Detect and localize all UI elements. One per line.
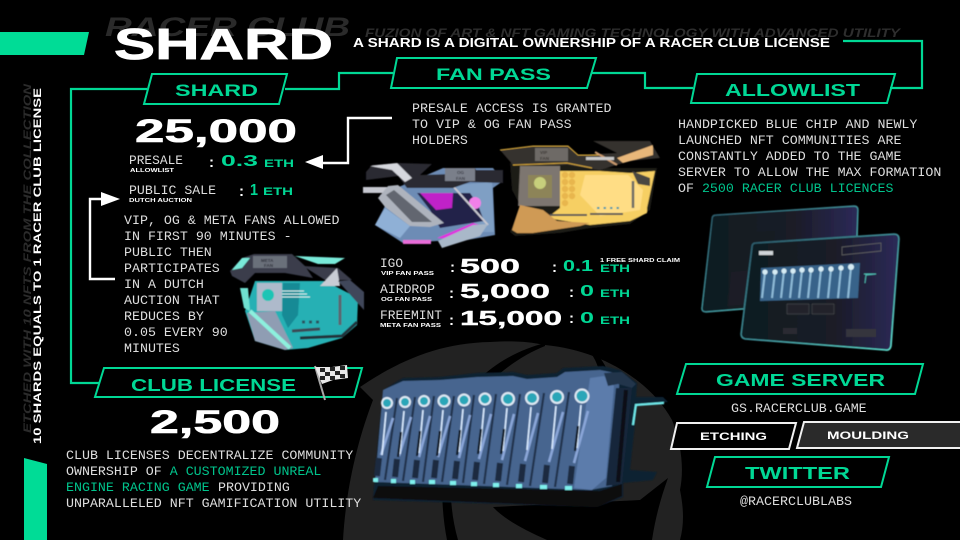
module cell grilles — [377, 458, 572, 484]
club license number: 2,500 — [150, 404, 280, 440]
twitter handle: @RACERCLUBLABS — [740, 494, 852, 509]
public sale price row: DUTCH AUCTION — [129, 198, 192, 204]
icon: vip fan pass shard — [500, 141, 660, 236]
module cell light strips — [381, 411, 588, 463]
module cell white stripes — [382, 405, 581, 455]
heading: game server: GAME SERVER — [716, 370, 885, 390]
igo row: IGO — [380, 256, 403, 271]
presale price row: 0.3 — [221, 153, 259, 170]
heading: fan pass — [391, 58, 596, 88]
heading: allowlist — [691, 74, 895, 103]
ghost tagline: FUZION OF ART & NFT GAMING TECHNOLOGY WITH ADVANCED UTILITY — [365, 26, 901, 40]
subtitle: A SHARD IS A DIGITAL OWNERSHIP OF A RACER CLUB LICENSE — [353, 36, 830, 50]
public sale price row: PUBLIC SALE — [129, 183, 216, 198]
public sale description: VIP, OG & META FANS ALLOWED — [124, 213, 339, 228]
allowlist description: CONSTANTLY ADDED TO THE GAME — [678, 149, 901, 164]
airdrop row: 5,000 — [460, 281, 550, 303]
igo row — [380, 256, 681, 278]
fan pass description: TO VIP & OG FAN PASS — [412, 117, 572, 132]
igo row: : — [450, 259, 455, 276]
freemint row: ETH — [600, 315, 630, 327]
module side bracket light — [633, 403, 664, 425]
club license description: PROVIDING — [218, 480, 290, 495]
icon: club license module — [373, 366, 668, 507]
freemint row: : — [449, 312, 454, 329]
presale price row — [129, 153, 294, 174]
background swirl logo — [343, 341, 683, 540]
igo row: : — [552, 259, 557, 276]
airdrop row: 0 — [580, 283, 594, 300]
public sale description: REDUCES BY — [124, 309, 204, 324]
public sale description: PARTICIPATES — [124, 261, 220, 276]
heading: shard — [144, 74, 287, 104]
bottom left green bar — [24, 458, 47, 540]
title: SHARD — [114, 20, 333, 69]
public sale description: AUCTION THAT — [124, 293, 220, 308]
icon: vip fan pass shard: VIP — [540, 150, 547, 155]
module cell dividers — [385, 392, 569, 487]
button: etching: ETCHING — [700, 431, 767, 443]
module lights — [382, 390, 588, 408]
icon: meta fan pass shard — [230, 254, 364, 350]
arrow: presale access to presale price — [305, 118, 392, 169]
club license description: OWNERSHIP OF A CUSTOMIZED UNREAL — [66, 464, 321, 479]
airdrop row: OG FAN PASS — [381, 297, 432, 303]
icon: og fan pass shard: FAN — [456, 176, 465, 181]
button: moulding: MOULDING — [827, 430, 909, 442]
game server url: GS.RACERCLUB.GAME — [731, 401, 867, 416]
freemint row: : — [569, 310, 574, 327]
airdrop row: : — [449, 285, 454, 302]
icon: vip fan pass shard: FAN — [540, 156, 549, 161]
heading: twitter — [707, 457, 889, 487]
freemint row: 15,000 — [460, 308, 562, 330]
freemint row: FREEMINT — [380, 308, 442, 323]
allowlist description: OF 2500 RACER CLUB LICENCES — [678, 181, 893, 196]
public sale price row: 1 — [250, 182, 258, 199]
module base lights — [373, 478, 572, 490]
airdrop row: AIRDROP — [380, 282, 435, 297]
icon: meta fan pass shard: FAN — [264, 263, 273, 268]
icon: meta fan pass shard: META — [261, 258, 274, 263]
heading: fan pass: FAN PASS — [436, 65, 551, 84]
igo row: 0.1 — [563, 258, 594, 275]
freemint row — [380, 308, 630, 330]
public sale price row — [129, 182, 293, 204]
club license description: CLUB LICENSES DECENTRALIZE COMMUNITY — [66, 448, 353, 463]
heading: game server — [677, 364, 923, 394]
icon: game server tablets — [702, 206, 899, 350]
top left green bar — [0, 32, 89, 55]
fan pass description: HOLDERS — [412, 133, 468, 148]
presale price row: ETH — [264, 158, 294, 170]
freemint row: 0 — [580, 310, 594, 327]
airdrop row — [380, 281, 630, 303]
allowlist description: LAUNCHED NFT COMMUNITIES ARE — [678, 133, 901, 148]
public sale description: MINUTES — [124, 341, 180, 356]
igo row: VIP FAN PASS — [381, 271, 434, 277]
public sale description: 0.05 EVERY 90 — [124, 325, 228, 340]
heading: shard: SHARD — [175, 81, 258, 100]
heading: twitter: TWITTER — [745, 463, 850, 483]
public sale price row: ETH — [263, 186, 293, 198]
club license description: ENGINE RACING GAME — [66, 480, 210, 495]
ghost vertical caption: ETCHED WITH 10 NFTS FROM THE COLLECTION — [22, 83, 34, 433]
igo row: 1 FREE SHARD CLAIM — [600, 258, 681, 264]
igo row: 500 — [460, 256, 520, 278]
module cell dark slots — [398, 426, 578, 457]
freemint row: META FAN PASS — [380, 323, 441, 329]
airdrop row: ETH — [600, 288, 630, 300]
public sale price row: : — [239, 183, 244, 200]
club license description: UNPARALLELED NFT GAMIFICATION UTILITY — [66, 496, 361, 511]
fan pass description: PRESALE ACCESS IS GRANTED — [412, 101, 612, 116]
button: etching — [671, 423, 796, 449]
presale price row: PRESALE — [129, 153, 183, 168]
public sale description: IN A DUTCH — [124, 277, 204, 292]
icon: checkered flag — [315, 365, 348, 400]
ghost heading: racer club: RACER CLUB — [105, 12, 350, 42]
public sale description: PUBLIC THEN — [124, 245, 212, 260]
heading: club license — [95, 368, 362, 397]
public sale description: IN FIRST 90 MINUTES - — [124, 229, 292, 244]
icon: og fan pass shard: OG — [457, 170, 465, 175]
presale price row: : — [209, 154, 214, 171]
heading: allowlist: ALLOWLIST — [725, 80, 860, 100]
allowlist description: SERVER TO ALLOW THE MAX FORMATION — [678, 165, 941, 180]
connector lines — [71, 41, 922, 383]
button: moulding — [797, 422, 960, 448]
shard supply number: 25,000 — [135, 113, 297, 149]
presale price row: ALLOWLIST — [130, 168, 175, 174]
icon: og fan pass shard — [363, 163, 503, 248]
arrow: dutch auction to public sale — [90, 192, 120, 279]
vertical caption: 10 SHARDS EQUALS TO 1 RACER CLUB LICENSE — [32, 88, 44, 444]
airdrop row: : — [569, 284, 574, 301]
heading: club license: CLUB LICENSE — [131, 375, 296, 395]
allowlist description: HANDPICKED BLUE CHIP AND NEWLY — [678, 117, 917, 132]
igo row: ETH — [600, 263, 630, 275]
